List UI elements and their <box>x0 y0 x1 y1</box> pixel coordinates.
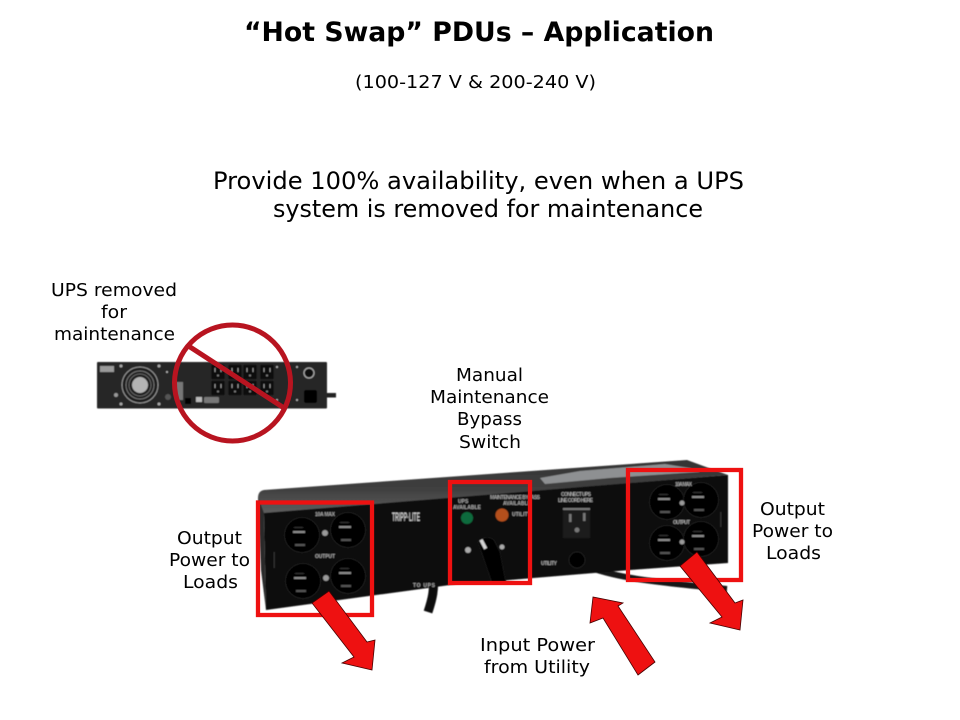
label: input power from utility: Input Power <box>480 635 596 656</box>
image: hot swap PDU: TRIPP·LITE <box>392 510 420 524</box>
highlight box: bypass switch <box>450 482 530 583</box>
label: manual maintenance bypass switch: Bypass <box>457 409 522 430</box>
label: right output power to loads: Output <box>760 499 825 520</box>
label: right output power to loads: Power to <box>752 521 833 542</box>
label: UPS removed for maintenance: UPS removed <box>51 280 177 301</box>
subtitle: voltage ranges: (100-127 V & 200-240 V) <box>355 72 596 93</box>
image: hot swap PDU: TO UPS <box>413 583 436 589</box>
label: input power from utility: from Utility <box>484 657 590 678</box>
status indicators and switch: AVAILABLE <box>503 501 532 507</box>
label: manual maintenance bypass switch: Switch <box>459 432 521 453</box>
right outlets <box>650 482 718 560</box>
right outlets: OUTPUT <box>673 520 690 526</box>
PDU front face <box>264 475 728 610</box>
title: “Hot Swap” PDUs – Application <box>244 17 714 48</box>
image: UPS rear panel <box>97 362 336 408</box>
left outlets: 10A MAX <box>315 512 336 518</box>
label: manual maintenance bypass switch: Maintenance <box>430 387 549 408</box>
label: input power from utility <box>480 635 596 678</box>
left outlets: OUTPUT <box>315 554 335 560</box>
text block: availability statement: Provide 100% availability, even when a UPS <box>213 167 744 195</box>
label: manual maintenance bypass switch <box>430 365 549 453</box>
utility input socket: LINE CORD HERE <box>558 498 594 504</box>
utility input socket: CONNECT UPS <box>561 492 592 498</box>
label: UPS removed for maintenance: maintenance <box>54 324 175 345</box>
label: UPS removed for maintenance: for <box>101 302 128 323</box>
image: hot swap PDU <box>258 460 728 612</box>
status indicators and switch: MAINTENANCE BYPASS <box>490 495 541 501</box>
label: left output power to loads: Output <box>177 528 242 549</box>
arrow: right output <box>680 552 743 630</box>
icon: prohibition sign <box>174 325 290 441</box>
arrow: left output <box>312 591 375 670</box>
arrow: input power <box>590 597 655 675</box>
highlight box: left output outlets <box>258 502 372 615</box>
highlight box: right output outlets <box>628 470 741 580</box>
label: manual maintenance bypass switch: Manual <box>456 365 523 386</box>
text block: availability statement <box>213 167 744 223</box>
PDU cables <box>428 565 727 612</box>
PDU top surface <box>258 460 728 514</box>
utility input socket: UTILITY <box>541 561 558 567</box>
label: left output power to loads: Power to <box>169 550 250 571</box>
label: right output power to loads: Loads <box>766 543 821 564</box>
label: left output power to loads: Loads <box>183 572 238 593</box>
label: left output power to loads <box>169 528 250 593</box>
label: UPS removed for maintenance <box>51 280 177 345</box>
utility input socket <box>541 492 594 568</box>
status indicators and switch: UTILITY <box>512 512 532 518</box>
status indicators and switch: AVAILABLE <box>453 505 482 511</box>
status indicators and switch: UPS <box>458 499 469 505</box>
right outlets: 10A MAX <box>675 482 693 488</box>
label: right output power to loads <box>752 499 833 564</box>
status indicators and switch <box>453 495 541 583</box>
left outlets <box>284 512 366 598</box>
text block: availability statement: system is removed for maintenance <box>273 195 703 223</box>
